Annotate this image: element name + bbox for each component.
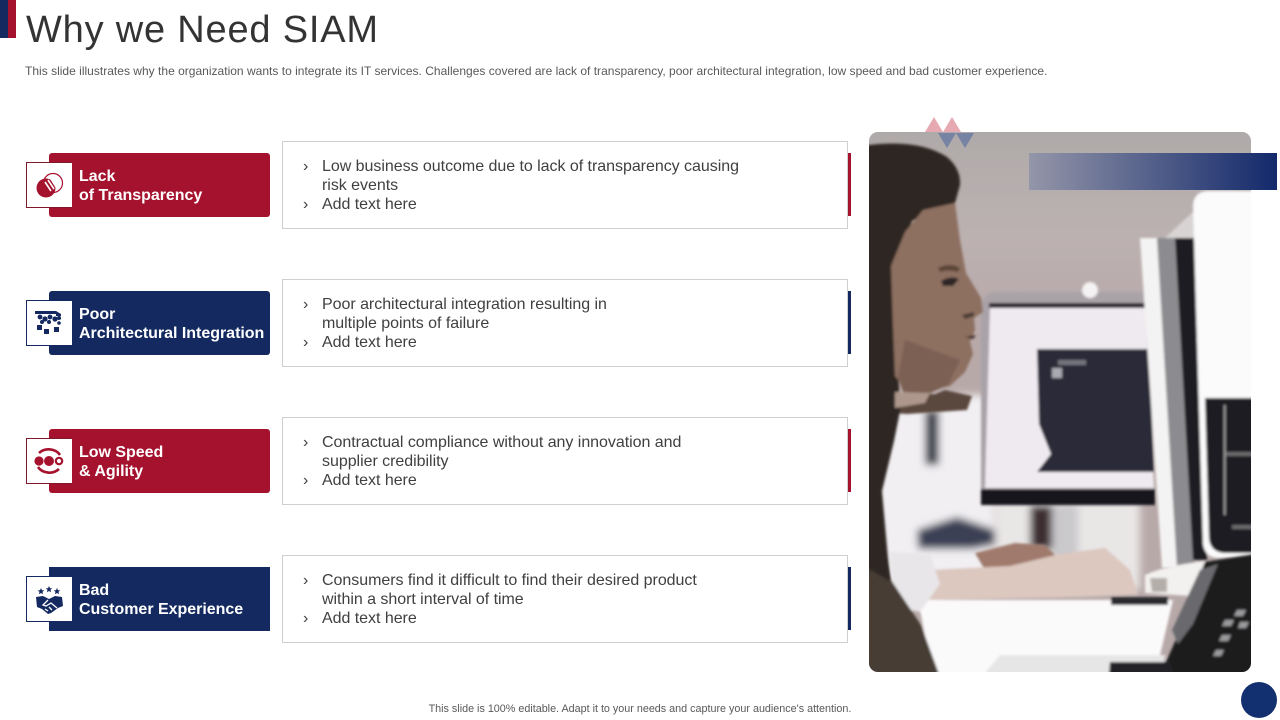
label: lack of transparency: of Transparency xyxy=(79,187,202,204)
row: lack of transparency xyxy=(26,141,851,229)
card: transparency text xyxy=(282,141,848,229)
card: integration text: Poor architectural integration resulting in xyxy=(322,296,607,313)
card: experience text xyxy=(282,555,848,643)
accent bar xyxy=(848,567,851,630)
label: low speed and agility: & Agility xyxy=(79,463,143,480)
icon: overlapping circles xyxy=(26,162,72,208)
front monitor xyxy=(1193,191,1267,558)
card: speed text xyxy=(282,417,848,505)
label: bad customer experience: Bad xyxy=(79,582,109,599)
icon: network blocks xyxy=(26,300,72,346)
side monitor xyxy=(1140,238,1177,568)
face xyxy=(891,203,983,390)
decorative triangles xyxy=(925,117,974,148)
page number circle xyxy=(1241,682,1277,718)
card: speed text: › xyxy=(303,434,308,451)
arms xyxy=(975,543,1057,570)
card: transparency text: Add text here xyxy=(322,196,417,213)
label: poor architectural integration: Architectural Integration xyxy=(79,325,264,342)
card: experience text: within a short interval of time xyxy=(322,591,524,608)
card: transparency text: › xyxy=(303,196,308,213)
phone xyxy=(1166,552,1267,687)
label: lack of transparency xyxy=(49,153,270,217)
accent bar xyxy=(848,153,851,216)
coffee mug xyxy=(1145,561,1205,596)
card: integration text: multiple points of failure xyxy=(322,315,489,332)
card: transparency text: › xyxy=(303,158,308,175)
photo: woman working at computer monitors xyxy=(869,132,1251,672)
card: speed text: › xyxy=(303,472,308,489)
neck shadow xyxy=(877,390,972,414)
label: poor architectural integration: Poor xyxy=(79,306,115,323)
card: integration text xyxy=(282,279,848,367)
label: low speed and agility xyxy=(49,429,270,493)
row: low speed and agility xyxy=(26,417,851,505)
card: integration text: › xyxy=(303,334,308,351)
label: poor architectural integration xyxy=(49,291,270,355)
subtitle: This slide illustrates why the organization wants to integrate its IT services. Challenges covered are lack of transparency, poor architectural integration, low speed and bad customer experience. xyxy=(25,64,1047,78)
title: Why we Need SIAM xyxy=(26,9,379,51)
label: lack of transparency: Lack xyxy=(79,168,115,185)
card: integration text: Add text here xyxy=(322,334,417,351)
row: bad customer experience xyxy=(26,555,851,643)
row: poor architectural integration xyxy=(26,279,851,367)
hair back xyxy=(855,144,960,581)
accent bar xyxy=(848,429,851,492)
card: experience text: › xyxy=(303,572,308,589)
label: bad customer experience: Customer Experience xyxy=(79,601,243,618)
card: transparency text: risk events xyxy=(322,177,398,194)
gradient bar xyxy=(1029,153,1277,190)
icon: handshake with stars xyxy=(26,576,72,622)
card: speed text: Contractual compliance without any innovation and xyxy=(322,434,681,451)
accent bar xyxy=(848,291,851,354)
card: experience text: Add text here xyxy=(322,610,417,627)
card: speed text: supplier credibility xyxy=(322,453,448,470)
middle monitor xyxy=(981,292,1153,504)
card: speed text: Add text here xyxy=(322,472,417,489)
label: low speed and agility: Low Speed xyxy=(79,444,163,461)
corner accent xyxy=(0,0,16,38)
card: experience text: › xyxy=(303,610,308,627)
shoulder xyxy=(855,490,943,685)
card: integration text: › xyxy=(303,296,308,313)
label: bad customer experience xyxy=(49,567,270,631)
card: experience text: Consumers find it difficult to find their desired product xyxy=(322,572,697,589)
desk xyxy=(918,600,1173,685)
card: transparency text: Low business outcome due to lack of transparency causing xyxy=(322,158,739,175)
icon: cycle with dots xyxy=(26,438,72,484)
footer note: This slide is 100% editable. Adapt it to your needs and capture your audience's attention. xyxy=(429,703,851,715)
